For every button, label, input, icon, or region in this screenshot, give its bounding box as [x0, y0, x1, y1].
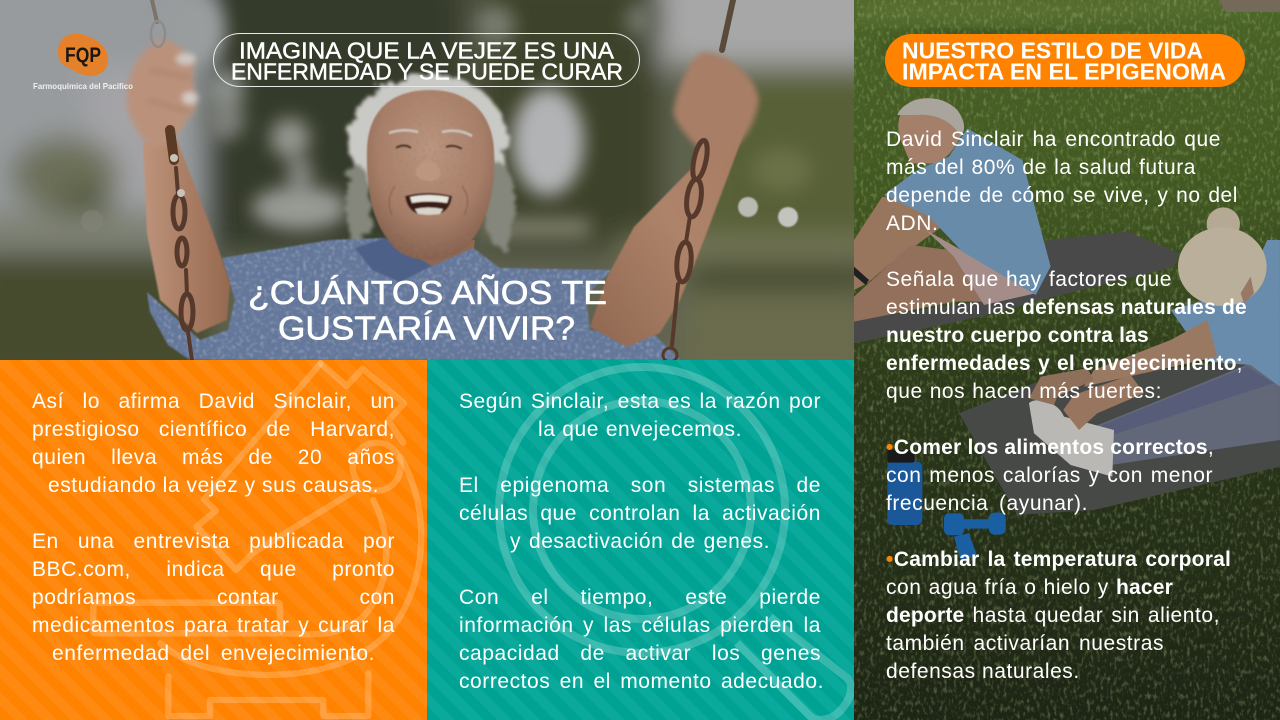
panel: orange text on David Sinclair: quien lleva más de 20 años — [32, 446, 395, 469]
panel: teal text on the epigenome: correctos en el momento adecuado. — [459, 670, 824, 693]
shirt — [884, 128, 1051, 295]
panel: teal text on the epigenome: la que envejecemos. — [538, 418, 742, 441]
heading: cuántos años te gustaría vivir: GUSTARÍA VIVIR? — [278, 310, 575, 346]
panel: teal text on the epigenome — [427, 360, 854, 720]
panel: orange text on David Sinclair: BBC.com, indica que pronto — [32, 558, 395, 581]
tree trunk corner — [1219, 0, 1280, 12]
face — [367, 90, 494, 260]
panel: orange text on David Sinclair: estudiando la vejez y sus causas. — [48, 474, 379, 497]
text: también activarían nuestras — [886, 632, 1164, 655]
text: •Cambiar la temperatura corporal — [886, 548, 1231, 571]
heading pill: imagina que la vejez: ENFERMEDAD Y SE PUEDE CURAR — [231, 59, 623, 85]
shirt — [147, 238, 680, 360]
right arm and hand — [590, 52, 759, 347]
shorts — [926, 230, 1036, 305]
heading pill: nuestro estilo de vida — [885, 34, 1245, 87]
text: nuestro cuerpo contra las — [886, 324, 1149, 347]
text: Señala que hay factores que — [886, 268, 1172, 291]
text: •Comer los alimentos correctos, — [886, 436, 1214, 459]
text block: lifestyle factors — [886, 128, 1247, 683]
text: ADN. — [886, 212, 938, 235]
text: más del 80% de la salud futura — [886, 156, 1196, 179]
text: frecuencia (ayunar). — [886, 492, 1088, 515]
scene drawn at 3x — [854, 98, 1280, 560]
heading pill: nuestro estilo de vida: IMPACTA EN EL EPIGENOMA — [902, 59, 1226, 85]
panel: orange text on David Sinclair: medicamentos para tratar y curar la — [32, 614, 395, 637]
hair — [345, 74, 515, 249]
panel: orange text on David Sinclair: enfermedad del envejecimiento. — [52, 642, 375, 665]
logo: Farmoquímica del Pacífico: FQP — [65, 44, 101, 67]
heading: cuántos años te gustaría vivir: ¿CUÁNTOS AÑOS TE — [248, 274, 607, 311]
text: deporte hasta quedar sin aliento, — [886, 604, 1220, 627]
text block: Sinclair intro — [32, 390, 395, 665]
photo: older couple stretching on the grass — [854, 0, 1280, 720]
panel: orange text on David Sinclair: prestigioso científico de Harvard, — [32, 418, 395, 441]
panel: teal text on the epigenome: células que controlan la activación — [459, 502, 821, 525]
panel: teal text on the epigenome: información y las células pierden la — [459, 614, 821, 637]
man's arms and legs — [854, 197, 949, 290]
panel: teal text on the epigenome: capacidad de activar los genes — [459, 642, 821, 665]
heading pill: imagina que la vejez — [213, 33, 640, 87]
text: David Sinclair ha encontrado que — [886, 128, 1221, 151]
panel: teal text on the epigenome: Según Sinclair, esta es la razón por — [459, 390, 821, 413]
icon: microscope watermark — [90, 360, 424, 720]
panel: teal text on the epigenome: y desactivación de genes. — [510, 530, 770, 553]
bottle — [887, 462, 922, 525]
text: estimulan las defensas naturales de — [886, 296, 1247, 319]
icon: magnifying glass watermark — [495, 363, 854, 720]
dumbbells — [944, 513, 964, 535]
panel: orange text on David Sinclair: Así lo afirma David Sinclair, un — [32, 390, 395, 413]
hands — [1029, 368, 1094, 405]
heading pill: imagina que la vejez: IMAGINA QUE LA VEJEZ ES UNA — [239, 38, 615, 64]
text: con agua fría o hielo y hacer — [886, 576, 1173, 599]
text block: epigenome explanation — [459, 390, 824, 693]
swing chains — [151, 0, 733, 362]
neck — [385, 240, 475, 285]
photo: smiling elderly woman on a swing — [0, 0, 854, 360]
head — [898, 98, 964, 163]
panel: teal text on the epigenome: El epigenoma son sistemas de — [459, 474, 821, 497]
heading pill: nuestro estilo de vida: NUESTRO ESTILO DE VIDA — [902, 38, 1203, 64]
panel: orange text on David Sinclair: En una entrevista publicada por — [32, 530, 395, 553]
wrist band — [854, 267, 869, 285]
text: depende de cómo se vive, y no del — [886, 184, 1238, 207]
text: enfermedades y el envejecimiento; — [886, 352, 1243, 375]
text: con menos calorías y con menor — [886, 464, 1213, 487]
woman: leggings — [1094, 363, 1280, 465]
logo: Farmoquímica del Pacífico — [33, 34, 133, 91]
text: que nos hacen más fuertes: — [886, 380, 1162, 403]
socks and feet — [1029, 400, 1114, 477]
panel: orange text on David Sinclair — [0, 360, 427, 720]
heading: cuántos años te gustaría vivir — [248, 274, 607, 346]
left arm and hand — [126, 40, 230, 333]
text: defensas naturales. — [886, 660, 1080, 683]
panel: teal text on the epigenome: Con el tiempo, este pierde — [459, 586, 821, 609]
panel: orange text on David Sinclair: podríamos contar con — [32, 586, 395, 609]
woman: shirt, arm, hair — [1171, 240, 1280, 387]
yoga mat — [854, 232, 1179, 343]
bokeh lights — [165, 0, 812, 238]
